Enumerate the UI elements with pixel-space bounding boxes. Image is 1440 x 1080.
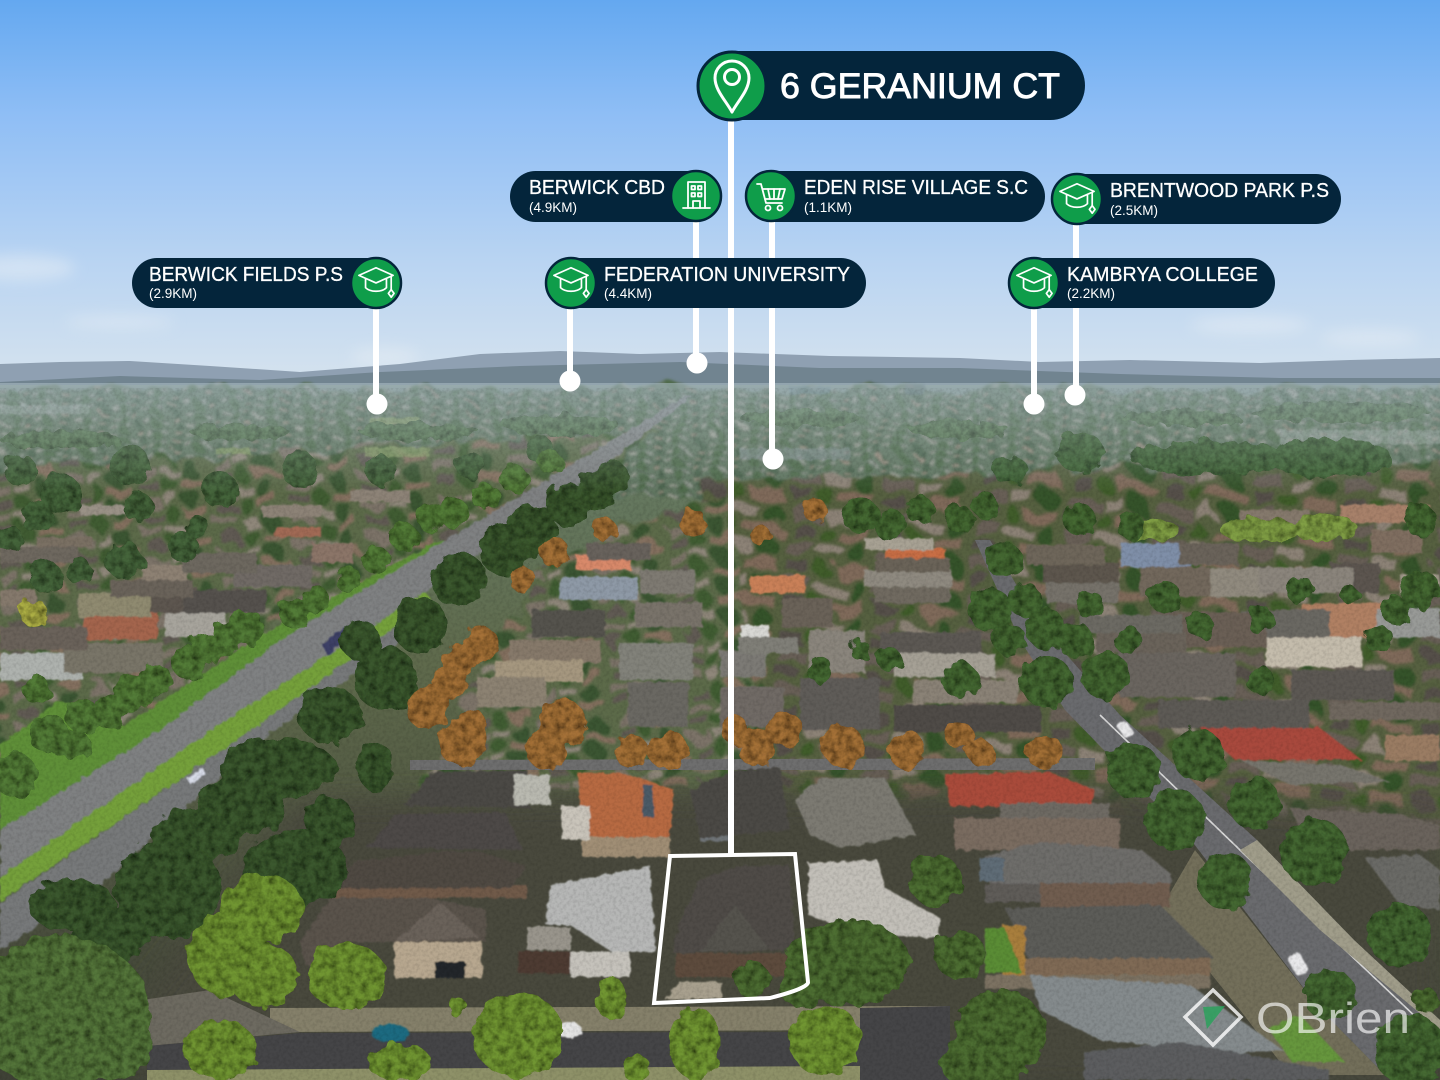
- label: Eden Rise Village S.C: [746, 171, 1045, 222]
- modern white-roof house: [518, 866, 656, 977]
- lower verge: [147, 1066, 860, 1080]
- front street: [147, 1006, 950, 1080]
- connector: Eden Rise: [762, 220, 784, 470]
- connector: Berwick CBD: [686, 220, 708, 374]
- subject property boundary: [654, 854, 808, 1003]
- connector: Brentwood Park: [1064, 222, 1086, 406]
- terracotta house: [562, 773, 674, 857]
- label: Berwick Fields P.S: [132, 258, 402, 308]
- label: Berwick CBD: (4.9KM): [529, 200, 577, 215]
- label: Federation University: [546, 258, 866, 308]
- label: Brentwood Park P.S: (2.5KM): [1110, 203, 1158, 218]
- icon: location pin: [715, 61, 749, 112]
- side road trees: [807, 492, 1440, 1080]
- bus: [322, 625, 352, 655]
- subject house: [665, 865, 795, 1000]
- distant hills: [0, 351, 1440, 420]
- central houses: [477, 538, 1041, 732]
- label: Brentwood Park P.S: BRENTWOOD PARK P.S: [1110, 180, 1329, 202]
- car on highway: [187, 768, 206, 784]
- cars: [371, 625, 1310, 1042]
- left suburb houses: [0, 490, 410, 680]
- icon: graduation cap: [359, 268, 394, 297]
- suburb texture: [0, 388, 1440, 840]
- icon: office building: [683, 182, 710, 208]
- right suburb houses: [1027, 505, 1440, 761]
- distant tree clusters: [0, 402, 1430, 450]
- large dark band right: [992, 432, 1392, 484]
- watermark logo: [1185, 990, 1410, 1045]
- sky background: [0, 0, 1440, 385]
- pale estates in distance: [0, 383, 1440, 460]
- highway and verges: [0, 396, 692, 950]
- connector: Kambrya College: [1024, 306, 1044, 414]
- far suburb band: [0, 388, 1440, 498]
- icon: graduation cap: [554, 268, 589, 297]
- clouds: [0, 255, 1420, 366]
- title pill: 6 Geranium Ct: 6 GERANIUM CT: [780, 67, 1060, 106]
- icon: shopping cart: [757, 184, 785, 210]
- label: Federation University: (4.4KM): [604, 286, 652, 301]
- front street footpath: [270, 1006, 950, 1032]
- title pill: 6 Geranium Ct: [698, 51, 1085, 120]
- label: Eden Rise Village S.C: (1.1KM): [804, 200, 852, 215]
- left scattered trees: [0, 436, 554, 593]
- upper verge trees: [0, 450, 562, 797]
- foreground dark garden trees: [734, 854, 1438, 1080]
- label: Berwick CBD: BERWICK CBD: [529, 177, 665, 199]
- label: Kambrya College: (2.2KM): [1067, 286, 1115, 301]
- highway tree belt: [28, 461, 629, 963]
- right suburb rows: [700, 460, 1440, 840]
- lawns: [985, 928, 1022, 973]
- corner footpath: [142, 990, 300, 1046]
- autumn trees: [405, 498, 1063, 770]
- suburb houses: [0, 490, 1440, 1080]
- label: Federation University: FEDERATION UNIVERSITY: [604, 264, 850, 286]
- photo grain: [0, 388, 1440, 1080]
- yellow-green band right: [1120, 514, 1357, 542]
- red roof houses: [945, 772, 1095, 808]
- label: Eden Rise Village S.C: EDEN RISE VILLAGE S.C: [804, 177, 1028, 199]
- cross street: [410, 758, 1095, 770]
- label: Kambrya College: [1009, 258, 1275, 308]
- icon: graduation cap: [1060, 184, 1095, 213]
- foreground left canopy: [0, 936, 152, 1080]
- median grass: [0, 592, 432, 902]
- label: Berwick Fields P.S: (2.9KM): [149, 286, 197, 301]
- upper carriageway: [0, 396, 692, 877]
- atmospheric haze: [0, 383, 1440, 493]
- nature strip: [1240, 840, 1440, 1030]
- tree-lined side road: [975, 540, 1440, 1075]
- label: Kambrya College: KAMBRYA COLLEGE: [1067, 264, 1258, 286]
- upper verge grass: [0, 540, 459, 830]
- sports ovals: [215, 418, 430, 457]
- foreground left houses: [300, 770, 550, 978]
- yellow tree: [20, 599, 48, 627]
- trees: [0, 402, 1440, 1080]
- central suburb rows: [420, 490, 760, 790]
- foreground dark base: [140, 790, 1440, 1080]
- foreground bright trees: [183, 873, 861, 1080]
- ground base: [0, 385, 1440, 1080]
- label: Berwick CBD: [510, 171, 722, 222]
- label: Berwick Fields P.S: BERWICK FIELDS P.S: [149, 264, 343, 286]
- icon: graduation cap: [1017, 268, 1052, 297]
- connector: Federation University: [560, 306, 580, 392]
- watermark logo: OBrien: [1256, 994, 1410, 1043]
- left suburb rows: [0, 430, 660, 800]
- connector: Berwick Fields: [366, 306, 388, 414]
- label: Brentwood Park P.S: [1052, 174, 1341, 224]
- right-of-centre houses: [690, 760, 1440, 1080]
- connector: main pin line: [728, 118, 734, 856]
- lower carriageway: [0, 600, 432, 950]
